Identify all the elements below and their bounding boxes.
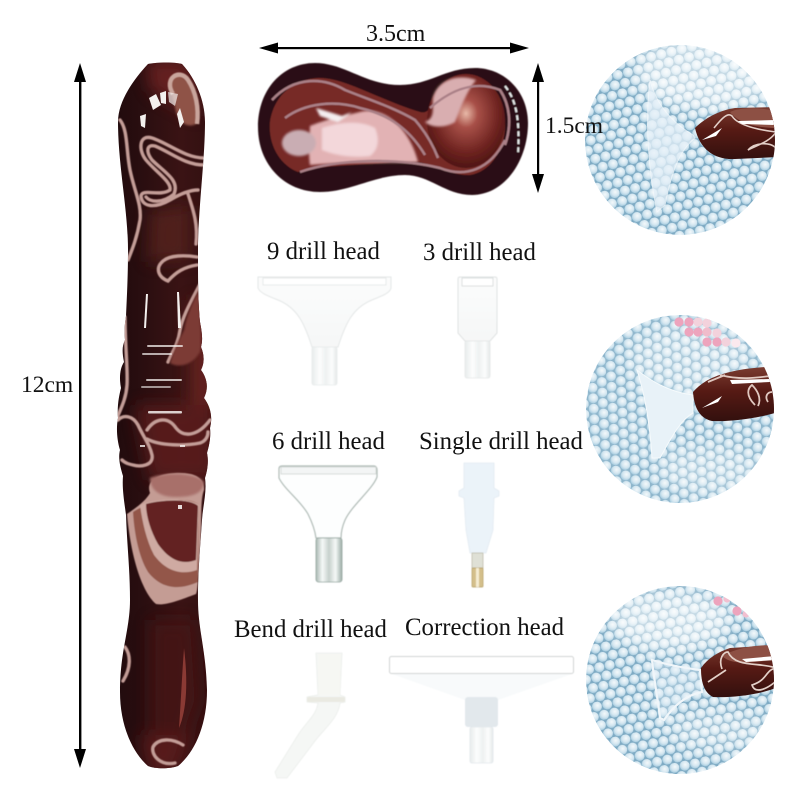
end view red core <box>270 78 505 175</box>
pen end view: peanut shape <box>258 63 528 195</box>
side height dimension arrow <box>532 63 544 193</box>
usage photo 1: wide head on blue beads <box>585 45 775 235</box>
photo 2 clear head <box>637 370 693 458</box>
photo 1 clear head <box>648 80 695 212</box>
label: side height, overlapping photo 1: 1.5cm <box>545 113 603 139</box>
photo 2 white bead wash <box>630 325 750 395</box>
drill head: single drill <box>419 428 584 587</box>
label: 3 drill head: 3 drill head <box>423 239 537 266</box>
photo 2 pen tip <box>693 367 778 421</box>
label: bend drill head: Bend drill head <box>234 616 387 643</box>
icon: correction head <box>390 656 574 763</box>
photo 1 white bead wash <box>628 45 767 118</box>
label: single drill head: Single drill head <box>419 428 584 455</box>
photo 3 clear head <box>652 660 702 720</box>
pen: marbled drill pen <box>116 62 212 768</box>
usage photo 2: six drill head on blue and pink beads <box>586 315 778 503</box>
photo 3 pen tip <box>701 645 778 697</box>
drill head: correction <box>390 614 574 763</box>
end view pale blocks <box>282 108 418 165</box>
top width dimension arrow <box>259 42 529 54</box>
pen marble swirl <box>127 473 204 604</box>
end view right sphere <box>427 74 505 168</box>
photo 2 pink beads <box>674 317 741 348</box>
drill head: 9 drill <box>258 238 391 385</box>
end view pale swirl <box>425 77 476 126</box>
pen gloss highlights <box>140 91 185 509</box>
label: correction head: Correction head <box>405 614 565 641</box>
label: 6 drill head: 6 drill head <box>272 428 386 455</box>
drill head: 6 drill <box>272 428 386 582</box>
end view swirl lines <box>272 81 509 172</box>
pen top loop <box>170 75 198 126</box>
pen lower streak <box>179 648 186 728</box>
drill head: 3 drill <box>423 239 537 378</box>
photo 1 pen tip <box>695 107 778 159</box>
label: pen height: 12cm <box>21 372 73 398</box>
photo 3 white bead wash <box>610 590 730 650</box>
drill head: bend drill <box>234 616 387 778</box>
label: width: 3.5cm <box>366 21 426 47</box>
label: 9 drill head: 9 drill head <box>267 238 381 265</box>
icon: single drill head <box>459 463 499 587</box>
end view right edge gloss <box>505 86 518 155</box>
pen lower pink fill near ribs <box>170 288 201 365</box>
photo 3 pink beads <box>713 595 750 618</box>
usage photo 3: outline head on blue beads <box>586 586 778 774</box>
left height dimension arrow <box>74 63 86 768</box>
icon: 6 drill head <box>279 466 377 582</box>
icon: 3 drill head <box>458 277 497 378</box>
pen red glow <box>135 60 215 775</box>
pen swirl lines <box>117 120 210 764</box>
icon: bend drill head <box>275 653 345 778</box>
icon: 9 drill head <box>258 277 391 385</box>
